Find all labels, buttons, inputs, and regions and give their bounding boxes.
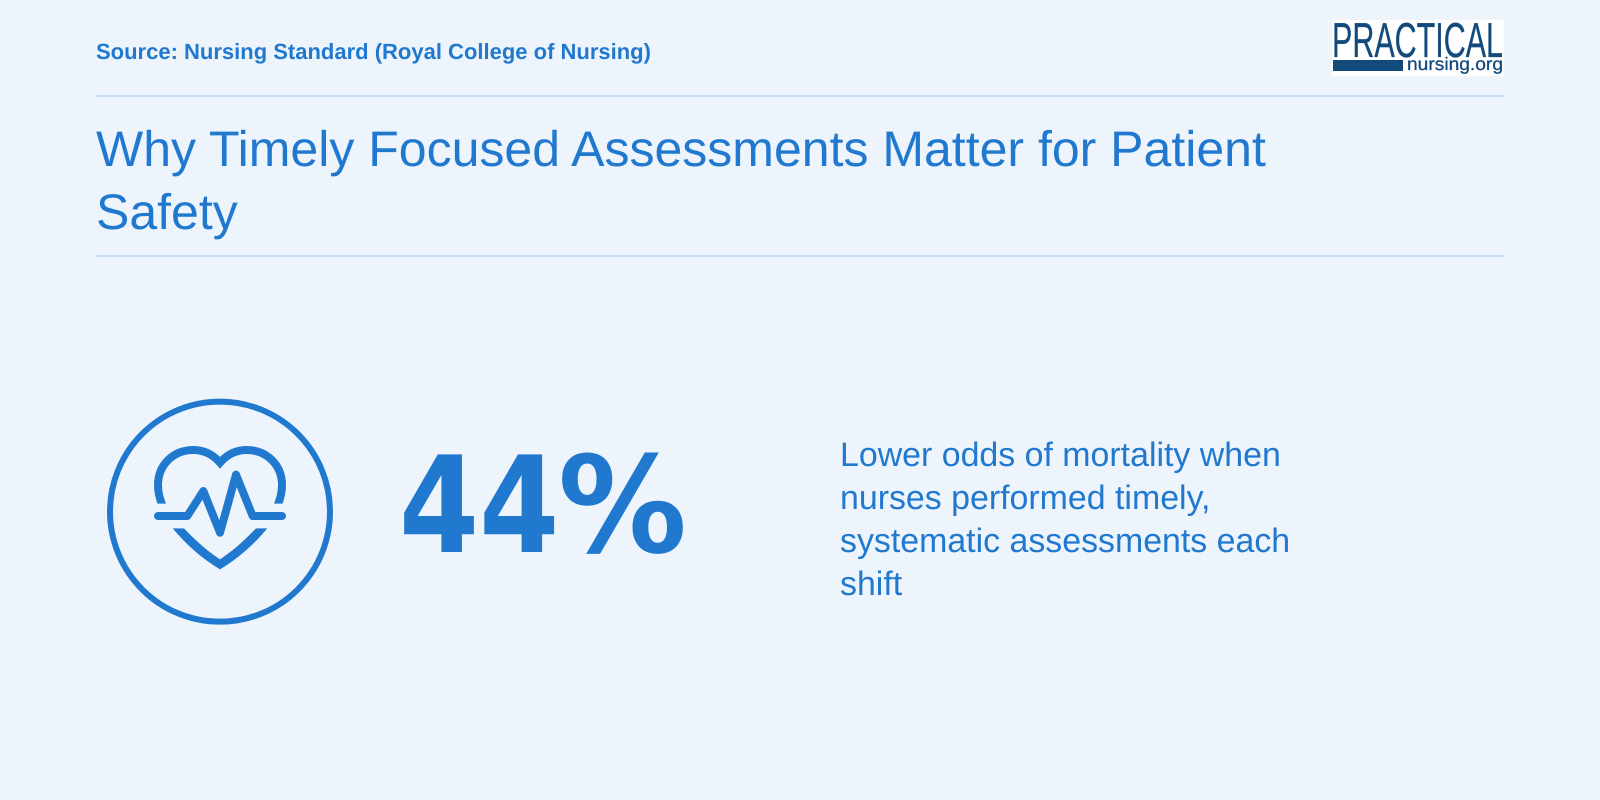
statistic description: Lower odds of mortality when nurses performed timely, systematic assessments each shift: [840, 436, 1290, 603]
title: Why Timely Focused Assessments Matter for Patient Safety: [96, 121, 1266, 240]
icon: heart with pulse in circle: [107, 398, 333, 625]
statistic: 44%: [399, 430, 687, 570]
source line: Source: Nursing Standard (Royal College of Nursing): [96, 39, 651, 64]
logo: Practical Nursing: nursing.org: [1407, 54, 1503, 74]
